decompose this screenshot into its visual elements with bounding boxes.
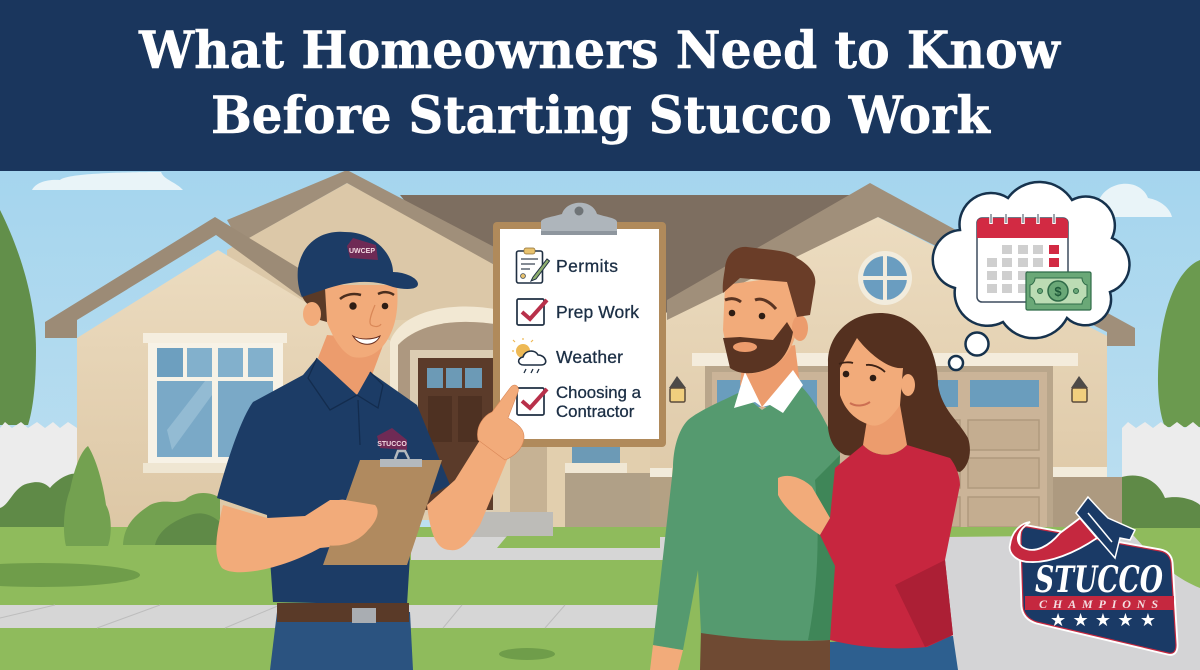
right hedge xyxy=(1122,476,1200,528)
right tree xyxy=(1158,260,1200,427)
entry steps xyxy=(470,512,553,537)
icon: prep work check xyxy=(517,299,547,325)
right gable roof trim xyxy=(667,183,1135,346)
walkway xyxy=(411,537,666,560)
scene background xyxy=(0,171,1200,670)
round window xyxy=(858,251,912,305)
entry arch xyxy=(390,307,500,520)
pointing hand xyxy=(477,385,524,460)
contractor figure xyxy=(216,232,524,670)
cap logo xyxy=(347,238,378,260)
cap xyxy=(298,232,418,297)
small bubbles xyxy=(966,332,988,356)
eyebrows xyxy=(340,292,394,299)
stone base left of garage xyxy=(645,468,672,477)
held clipboard xyxy=(323,451,442,565)
man pants xyxy=(700,630,830,670)
woman hand xyxy=(778,476,830,535)
yard and landscaping xyxy=(0,446,1200,670)
shirt collar xyxy=(734,370,803,413)
text: Weather: Weather xyxy=(556,347,623,367)
thought bubble xyxy=(933,182,1129,370)
icon: dollar bill: $ xyxy=(1054,284,1062,299)
man eyebrows xyxy=(725,299,776,309)
cloud left xyxy=(32,172,183,190)
hair xyxy=(302,288,327,322)
board xyxy=(493,222,666,447)
centre gable roof trim xyxy=(227,170,500,268)
right fence xyxy=(1122,422,1200,510)
red sweater xyxy=(820,445,960,648)
red band xyxy=(1025,596,1174,610)
text: Choosing a Contractor: Choosing a xyxy=(556,383,642,402)
icon: calendar xyxy=(977,213,1068,302)
stars: ★★★★★ xyxy=(1050,610,1156,631)
shirt xyxy=(217,358,450,605)
cloud shape xyxy=(933,182,1129,338)
left window xyxy=(143,333,287,473)
woman ear xyxy=(901,374,915,396)
area under clipboard xyxy=(500,440,650,530)
mouth xyxy=(733,342,757,352)
shirt logo: STUCCO xyxy=(377,441,407,448)
pants xyxy=(270,612,413,670)
man left hand xyxy=(650,645,683,670)
green sweater xyxy=(653,385,840,650)
cap logo: UWCEP xyxy=(349,248,375,255)
lawn xyxy=(0,527,1200,670)
house xyxy=(45,170,1135,540)
neck xyxy=(318,335,385,402)
small lawn patch xyxy=(497,536,660,548)
trowel xyxy=(1076,497,1135,558)
right gable wall xyxy=(650,217,1107,540)
left fence xyxy=(0,422,77,510)
ear xyxy=(303,302,321,326)
cypress shrub xyxy=(64,446,111,546)
icon: dollar bill xyxy=(1026,272,1091,310)
woman eyes xyxy=(843,371,849,377)
belt buckle xyxy=(352,608,376,623)
woman hair xyxy=(828,313,970,472)
smile xyxy=(353,336,380,344)
woman jeans xyxy=(830,636,958,670)
title line 1: What Homeowners Need to Know xyxy=(138,21,1061,81)
dark main roof xyxy=(400,195,880,320)
title line 2: Before Starting Stucco Work xyxy=(211,86,992,146)
nose xyxy=(370,305,381,327)
door frame xyxy=(410,350,500,515)
belt xyxy=(277,603,409,622)
metal clip xyxy=(541,203,617,235)
icon: weather xyxy=(512,338,546,373)
logo: Stucco Champions xyxy=(1010,497,1176,653)
red swoosh xyxy=(1010,518,1097,562)
man face xyxy=(723,275,797,374)
cloud right xyxy=(1075,184,1172,217)
left wing wall xyxy=(77,250,400,540)
left tree xyxy=(0,210,36,425)
paper xyxy=(500,229,659,439)
couple xyxy=(650,247,970,670)
wall lanterns xyxy=(669,376,1088,402)
woman face xyxy=(840,338,903,426)
sweater shadow xyxy=(808,455,840,640)
text: Permits: Permits xyxy=(556,256,618,276)
sidewalk xyxy=(0,605,665,628)
checklist clipboard xyxy=(493,203,666,447)
left arm xyxy=(216,500,350,572)
ear xyxy=(792,315,808,341)
woman eyebrows xyxy=(839,362,885,372)
hand on clipboard xyxy=(318,500,378,546)
woman neck xyxy=(863,405,907,455)
front shrubs xyxy=(123,493,220,545)
stone base right of garage xyxy=(1053,467,1122,537)
man hair xyxy=(723,247,815,317)
shirt logo xyxy=(377,428,407,450)
eyes xyxy=(349,302,357,310)
shield xyxy=(1021,527,1176,653)
text: Choosing a Contractor: Contractor xyxy=(556,402,635,421)
garage xyxy=(692,353,1078,538)
lawn shadows xyxy=(0,563,140,587)
man eyes xyxy=(729,310,735,316)
text: Prep Work: Prep Work xyxy=(556,302,639,322)
icon: permit document xyxy=(516,248,550,283)
entry wall xyxy=(390,320,500,520)
right arm xyxy=(427,440,507,550)
sweater shadow xyxy=(895,560,953,647)
centre gable wall xyxy=(227,183,493,340)
man neck xyxy=(740,345,800,408)
driveway xyxy=(945,535,1200,670)
woman smile xyxy=(850,402,870,406)
tagline: CHAMPIONS xyxy=(1039,597,1158,611)
head xyxy=(318,285,398,358)
collar lines xyxy=(308,358,383,445)
left wing roof trim xyxy=(45,217,305,338)
beard xyxy=(723,322,793,373)
front door xyxy=(418,358,493,510)
icon: contractor check xyxy=(517,388,547,415)
title band xyxy=(0,0,1200,171)
left hedge xyxy=(0,474,80,527)
